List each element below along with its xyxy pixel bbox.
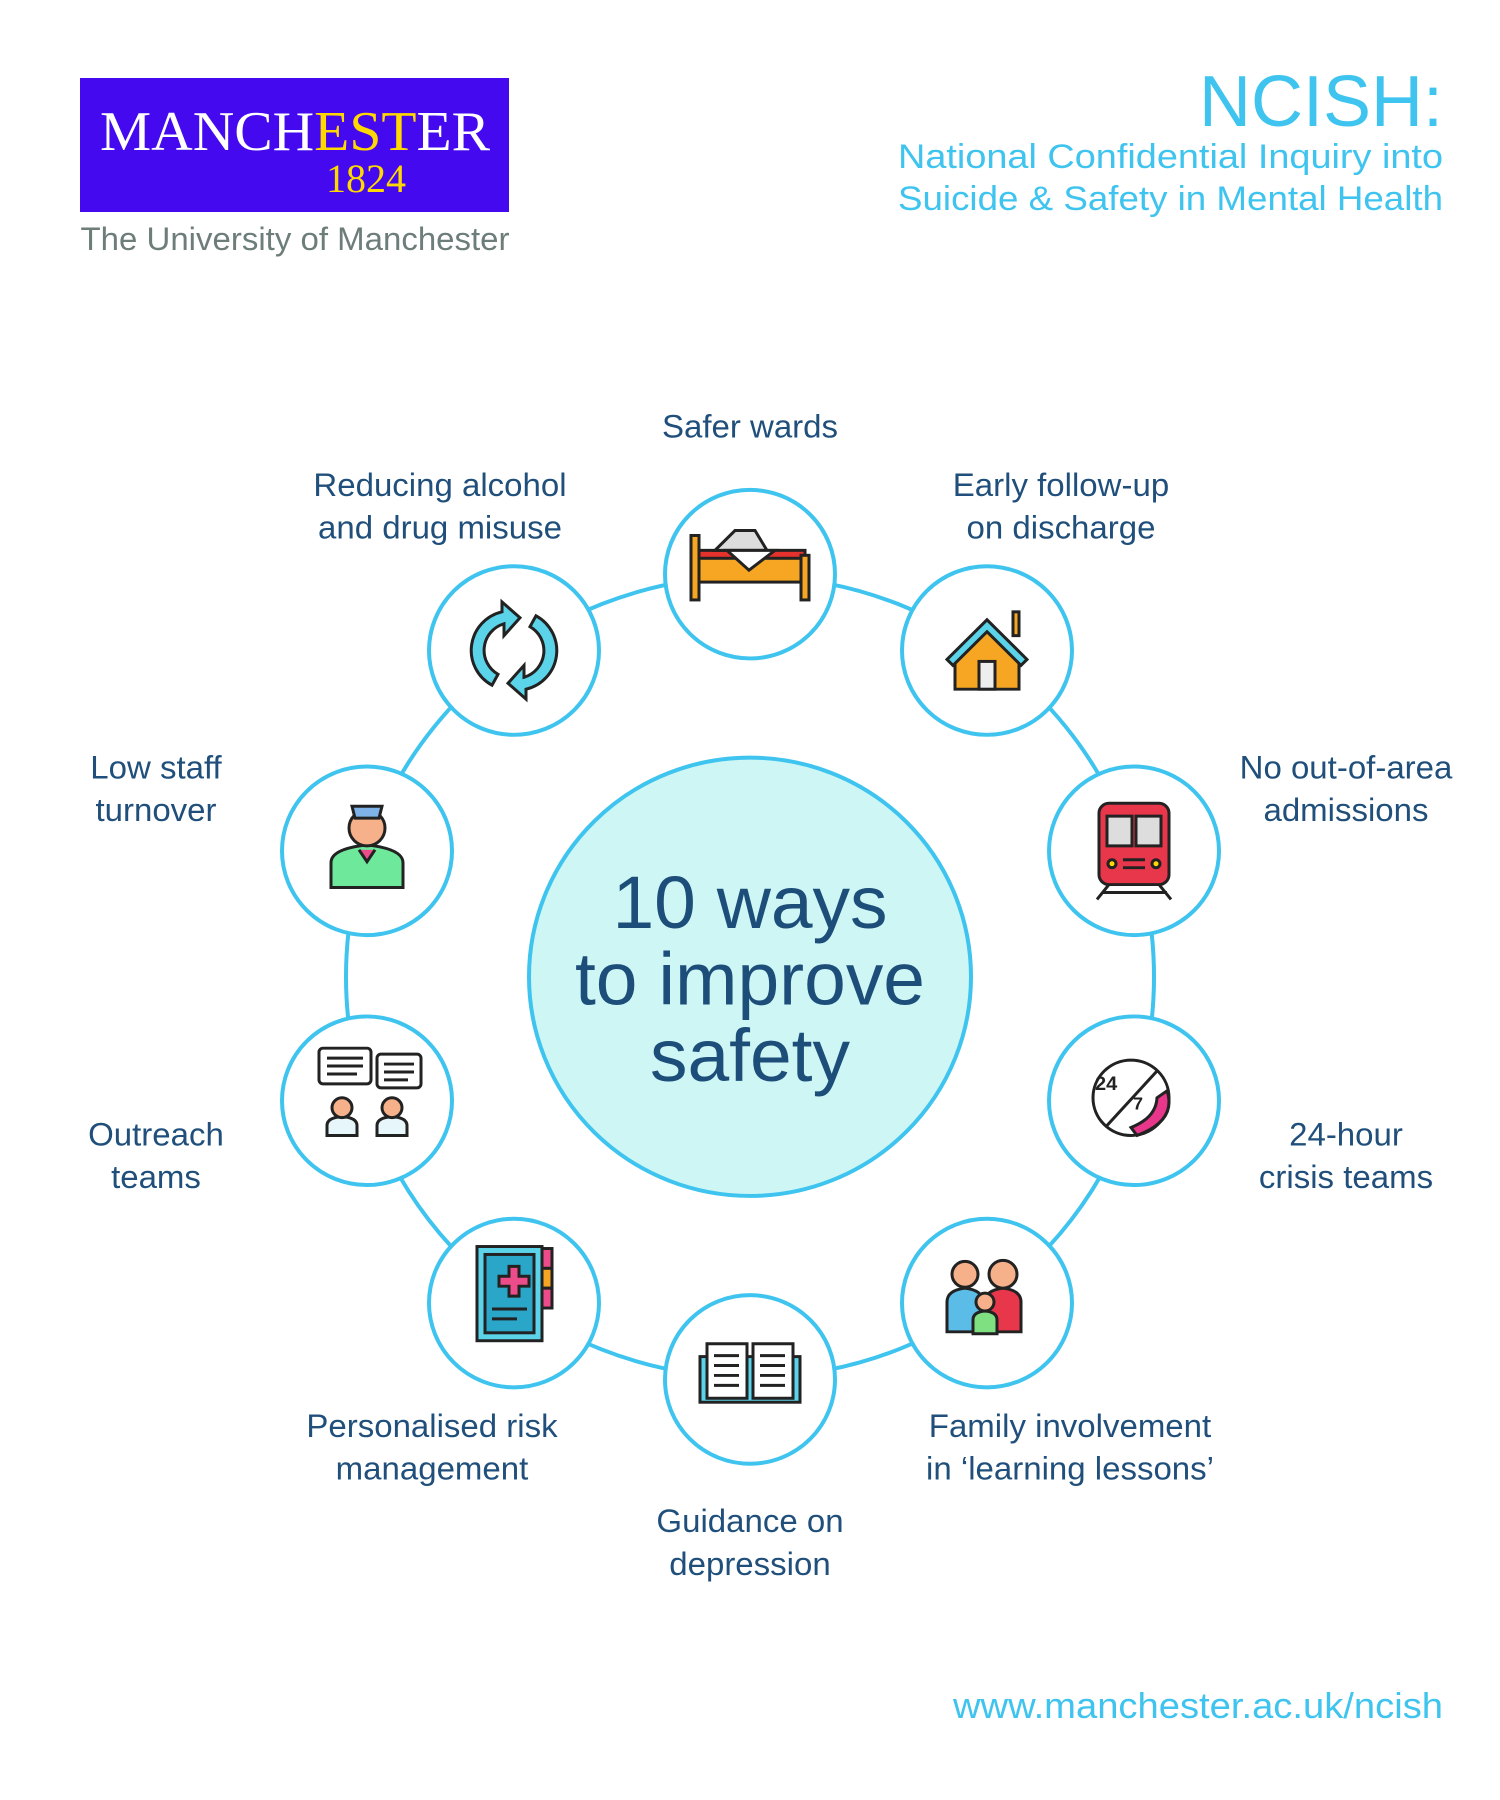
label: family involvement: in ‘learning lessons’ <box>926 1450 1214 1487</box>
icon: open book <box>700 1344 800 1402</box>
center circle: 10 ways to improve safety <box>529 758 971 1196</box>
icon: 24/7 phone: 7 <box>1133 1094 1143 1114</box>
icon: recycle arrows <box>471 602 557 699</box>
label: 24-hour crisis teams: crisis teams <box>1259 1158 1433 1195</box>
title: NCISH: National Confidential Inquiry into <box>898 138 1443 176</box>
icon: 24/7 phone: 24 <box>1095 1073 1117 1095</box>
label: no out-of-area: No out-of-area <box>1240 749 1453 785</box>
label: early follow-up: on discharge <box>967 509 1155 545</box>
label: low staff turnover: Low staff <box>90 749 223 785</box>
node circles <box>282 490 1219 1464</box>
label: guidance on depression: depression <box>669 1545 831 1582</box>
label: early follow-up: Early follow-up <box>953 466 1169 503</box>
logo: University of Manchester: The University of Manchester <box>80 221 510 257</box>
icon: train <box>1097 803 1171 899</box>
labels <box>88 407 1453 1582</box>
icon: family <box>947 1260 1021 1334</box>
title: NCISH: Suicide & Safety in Mental Health <box>898 180 1443 218</box>
center circle: 10 ways to improve safety: to improve <box>575 937 925 1020</box>
logo: University of Manchester: 1824 <box>326 156 406 201</box>
label: guidance on depression: Guidance on <box>656 1502 844 1539</box>
label: safer wards: Safer wards <box>662 407 838 444</box>
label: reducing alcohol: Reducing alcohol <box>313 466 567 503</box>
logo: University of Manchester <box>80 78 510 257</box>
icon: outreach people with speech bubbles <box>319 1048 421 1135</box>
diagram: ring of ten ways <box>88 407 1453 1582</box>
center circle: 10 ways to improve safety: safety <box>650 1013 851 1097</box>
title: NCISH: NCISH: <box>1199 62 1443 142</box>
icon: nurse <box>331 806 403 888</box>
icon: house <box>947 612 1027 689</box>
label: no out-of-area: admissions <box>1263 791 1429 828</box>
icon: bed <box>691 531 809 600</box>
label: outreach teams: Outreach <box>88 1115 224 1152</box>
label: reducing alcohol: and drug misuse <box>318 509 562 545</box>
label: outreach teams: teams <box>111 1158 201 1195</box>
label: low staff turnover: turnover <box>95 791 217 828</box>
logo: University of Manchester: MANCHESTER <box>100 101 491 163</box>
label: family involvement: Family involvement <box>929 1407 1211 1444</box>
label: 24-hour crisis teams: 24-hour <box>1289 1115 1403 1152</box>
label: personalised risk: management <box>336 1450 528 1487</box>
icon: 24/7 phone <box>1093 1060 1169 1135</box>
label: personalised risk: Personalised risk <box>306 1407 558 1444</box>
center circle: 10 ways to improve safety: 10 ways <box>612 860 888 944</box>
icon: medical file <box>477 1247 552 1341</box>
footer url: www.manchester.ac.uk/ncish <box>952 1685 1443 1726</box>
title: NCISH <box>898 62 1443 218</box>
